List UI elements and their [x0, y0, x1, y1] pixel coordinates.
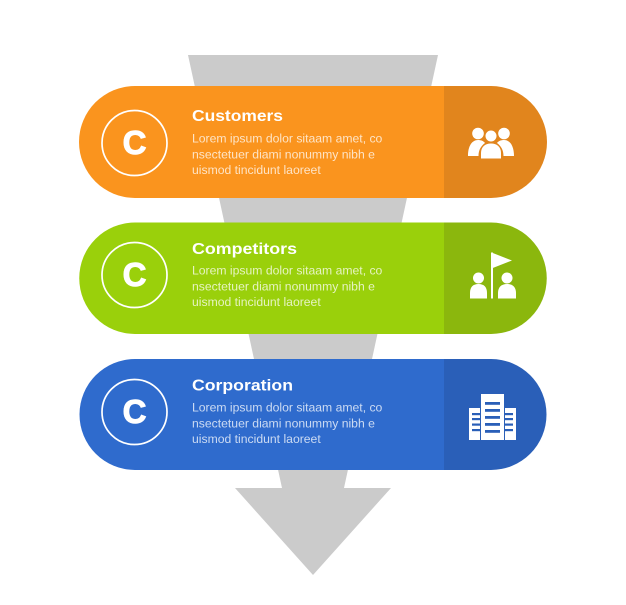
customers bar [79, 86, 444, 198]
corporation heading: Corporation [192, 378, 293, 394]
customers text: Lorem ipsum dolor sitaam amet, co [192, 132, 383, 146]
corporation icon panel [444, 359, 547, 470]
corporation badge: C [123, 393, 146, 430]
competitors text: nsectetuer diami nonummy nibh e [192, 280, 375, 294]
corporation text: Lorem ipsum dolor sitaam amet, co [192, 400, 383, 414]
icon: people with flag [470, 252, 516, 298]
competitors heading: Competitors [192, 241, 297, 258]
competitors text: uismod tincidunt laoreet [192, 295, 321, 309]
corporation bar [80, 359, 444, 470]
competitors icon panel [444, 222, 547, 334]
corporation text: nsectetuer diami nonummy nibh e [192, 416, 375, 430]
icon: people group [468, 128, 514, 158]
customers icon panel [444, 86, 547, 198]
customers badge: C [123, 124, 146, 161]
panel: customers [79, 86, 547, 198]
icon: office buildings [469, 394, 516, 440]
customers badge [102, 110, 167, 176]
competitors badge [102, 242, 167, 308]
panel: corporation [80, 359, 547, 470]
corporation badge [102, 380, 167, 444]
panel: competitors [79, 222, 547, 334]
customers text: uismod tincidunt laoreet [192, 163, 321, 177]
customers heading: Customers [192, 108, 283, 125]
funnel arrow [188, 55, 438, 575]
corporation text: uismod tincidunt laoreet [192, 432, 321, 446]
customers text: nsectetuer diami nonummy nibh e [192, 148, 375, 162]
competitors badge: C [123, 256, 146, 293]
competitors bar [79, 222, 444, 334]
competitors text: Lorem ipsum dolor sitaam amet, co [192, 264, 383, 278]
